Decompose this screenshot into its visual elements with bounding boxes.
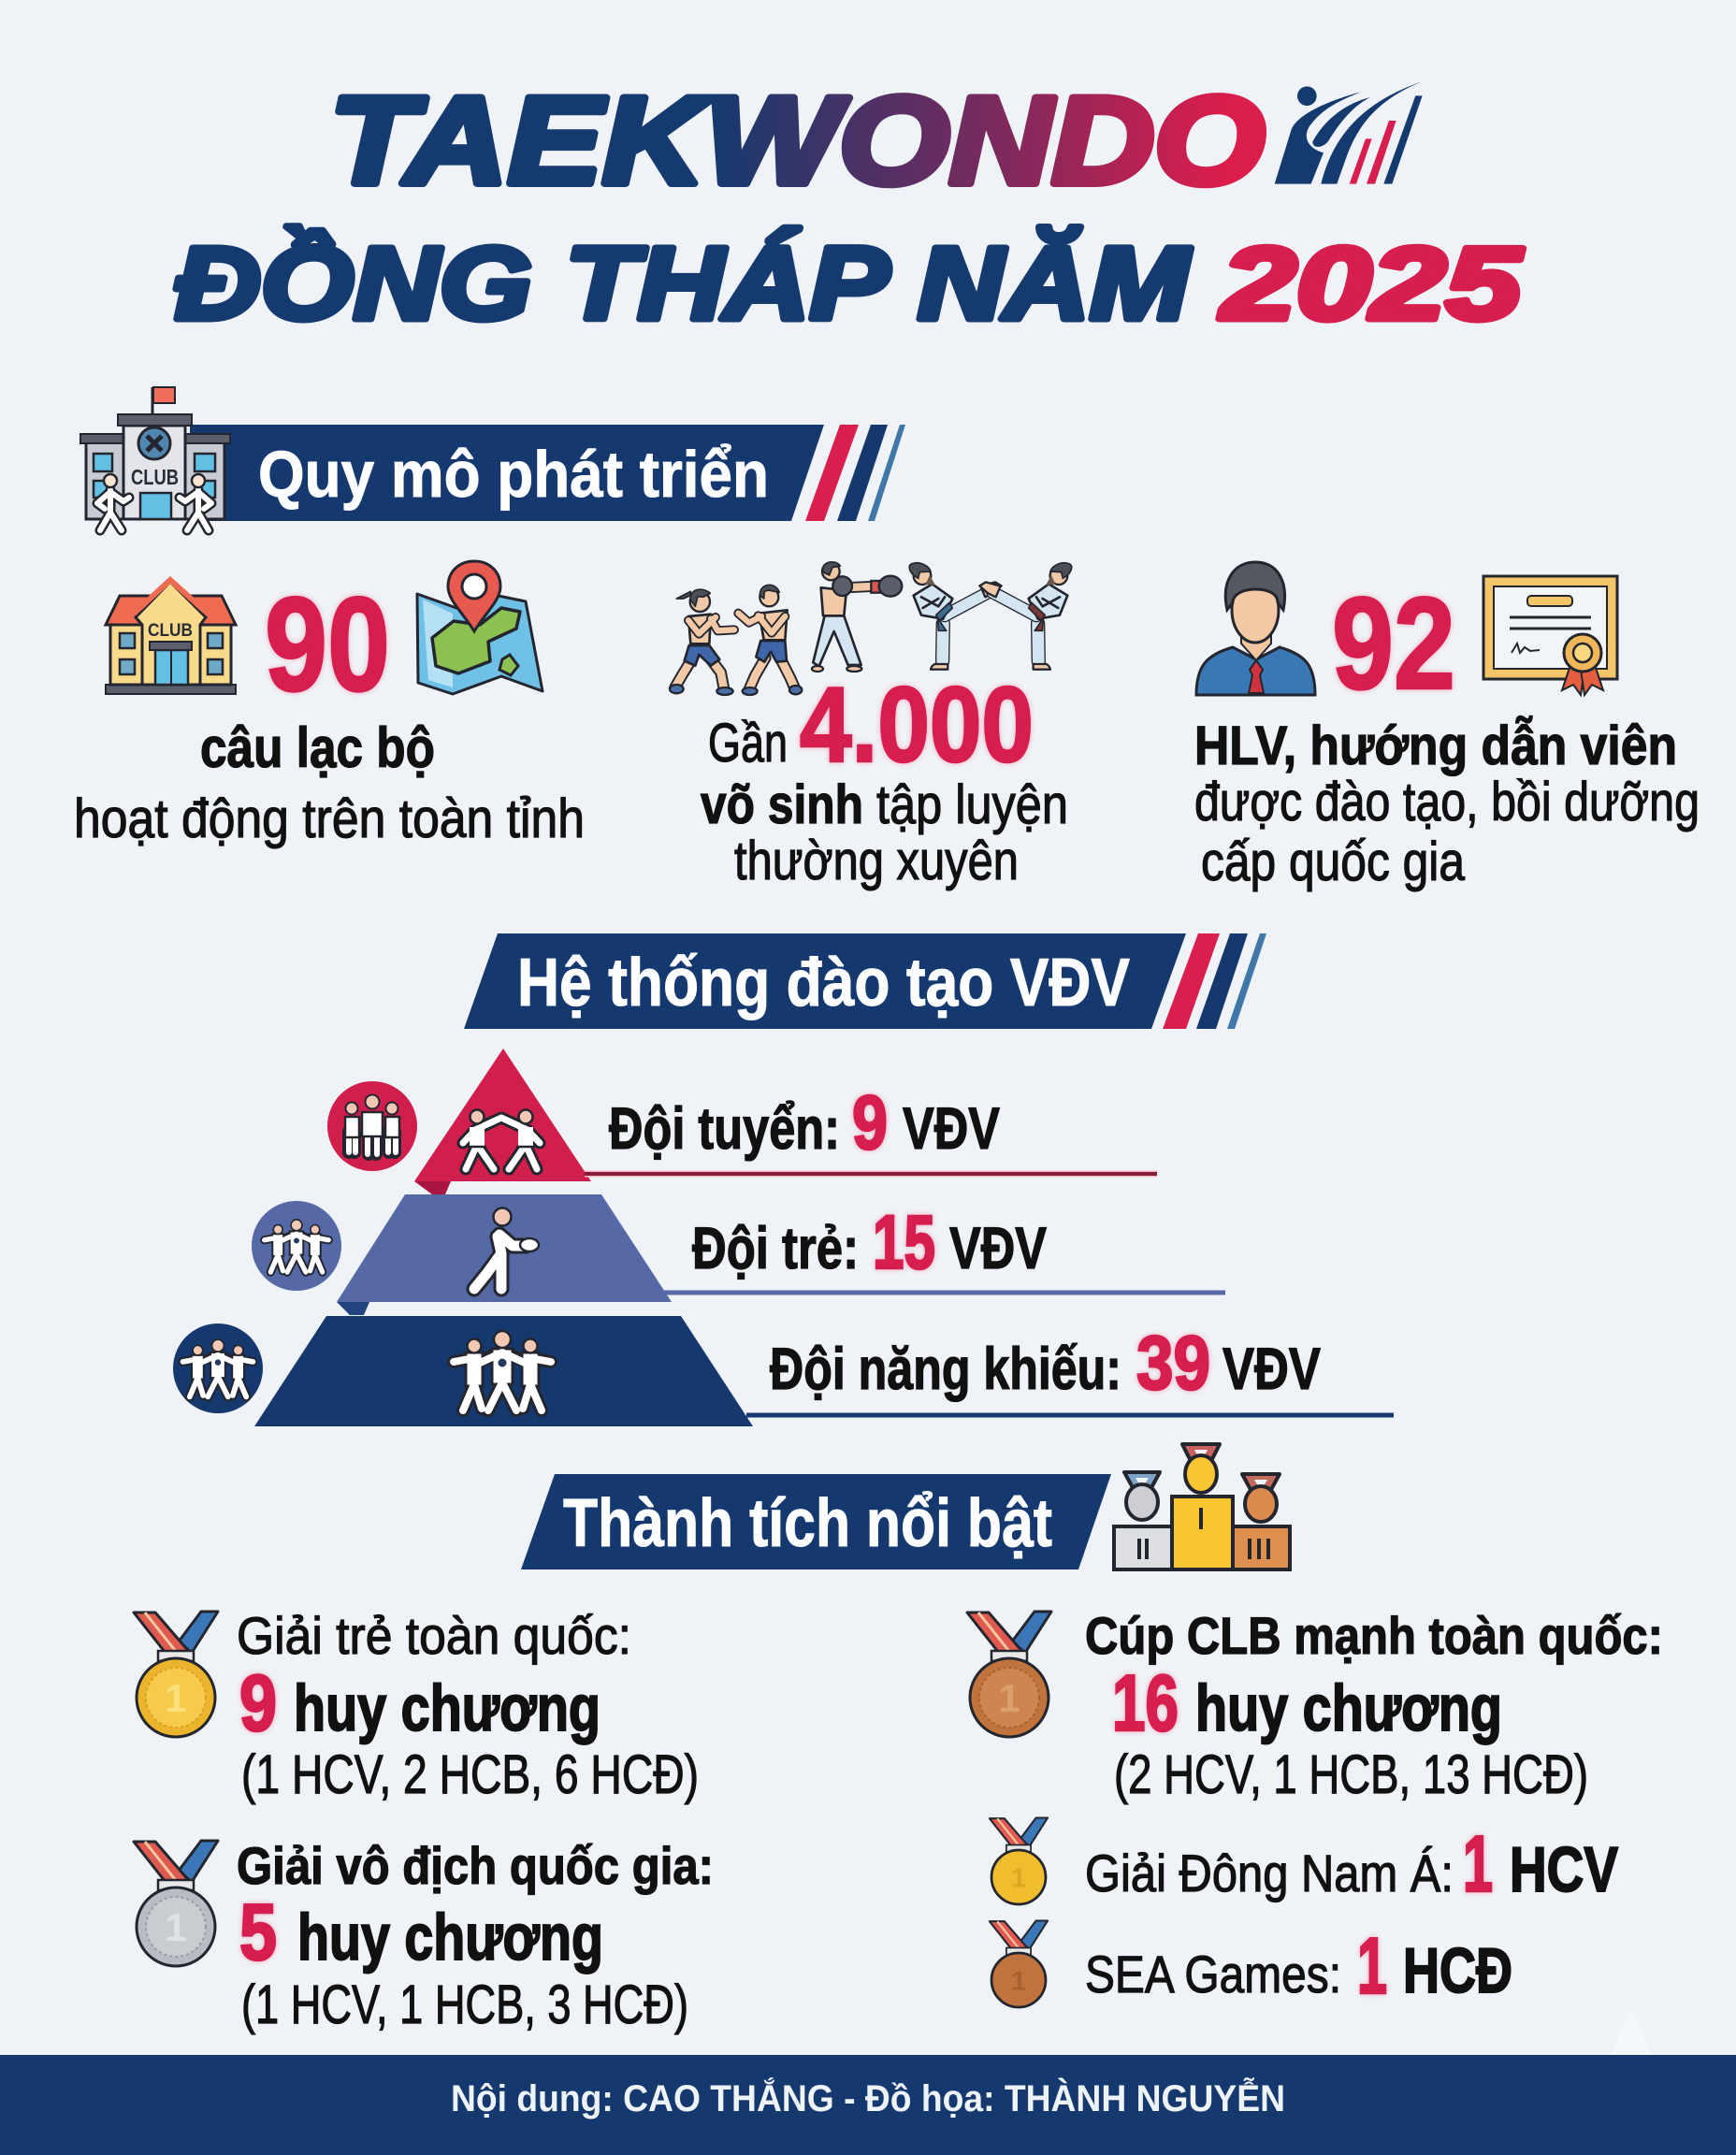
text: huy chương: huy chương — [297, 1901, 603, 1974]
decorative faint triangle — [1611, 2008, 1652, 2055]
title — [175, 72, 1523, 341]
text: medal breakdown: (1 HCV, 1 HCB, 3 HCĐ) — [241, 1974, 688, 2035]
heading: Quy mô phát triển — [190, 425, 905, 521]
icon: small gold medal: 1 — [1011, 1863, 1026, 1893]
icon: club house: CLUB — [148, 621, 193, 641]
text: huy chương: huy chương — [294, 1671, 600, 1744]
icon: gold medal — [134, 1612, 218, 1737]
icon: taekwondo logo — [1275, 81, 1423, 184]
text: medal breakdown: (1 HCV, 2 HCB, 6 HCĐ) — [241, 1744, 699, 1805]
text: HCV: HCV — [1510, 1834, 1618, 1905]
label: Đội tuyển: Đội tuyển: — [609, 1096, 840, 1162]
icon: map with pin — [417, 561, 542, 694]
stat: 92 coaches — [1194, 562, 1700, 892]
text: HCĐ: HCĐ — [1403, 1935, 1512, 2006]
label: Đội năng khiếu: VĐV — [1222, 1337, 1321, 1402]
number: 4.000: 4.000 — [800, 666, 1034, 785]
text: thường xuyên: thường xuyên — [734, 831, 1019, 891]
number: 90: 90 — [265, 571, 390, 719]
circle icon: talent team — [173, 1323, 263, 1413]
icon: gold medal: 1 — [165, 1676, 187, 1720]
number: 5: 5 — [239, 1888, 277, 1977]
fighter: girl — [670, 589, 734, 695]
text: Giải trẻ toàn quốc: Giải trẻ toàn quốc: — [237, 1606, 631, 1665]
text: cấp quốc gia: cấp quốc gia — [1201, 832, 1466, 892]
achievement: Cúp CLB mạnh toàn quốc — [967, 1606, 1663, 1805]
label: Đội năng khiếu: Đội năng khiếu: — [770, 1337, 1121, 1402]
chart: training pyramid — [173, 1049, 753, 1426]
label: Đội trẻ: Đội trẻ: — [692, 1216, 859, 1281]
icon: bronze medal — [967, 1612, 1051, 1737]
text: Cúp CLB mạnh toàn quốc: Cúp CLB mạnh toàn quốc: — [1085, 1606, 1663, 1665]
fighter: boxer — [812, 562, 902, 672]
text: hoạt động trên toàn tỉnh: hoạt động trên toàn tỉnh — [74, 788, 585, 849]
number: 1: 1 — [1463, 1820, 1493, 1909]
label: Đội tuyển: 9 — [852, 1080, 888, 1165]
icon: coach — [1196, 562, 1315, 695]
level: youth team — [337, 1194, 672, 1315]
achievement: Giải vô địch quốc gia — [134, 1836, 714, 2035]
heading: Thành tích nổi bật: Thành tích nổi bật — [563, 1486, 1052, 1561]
achievement: Giải trẻ toàn quốc — [134, 1606, 699, 1805]
label: Đội tuyển: VĐV — [903, 1096, 1000, 1162]
number: 92: 92 — [1332, 570, 1455, 716]
label: Đội tuyển — [585, 1080, 1157, 1174]
text: câu lạc bộ: câu lạc bộ — [200, 716, 435, 779]
icon: podium with medals — [1114, 1444, 1290, 1569]
text: võ sinh tập luyện — [701, 774, 1068, 835]
stat: 90 clubs — [74, 561, 585, 849]
circle icon: national team — [327, 1081, 417, 1171]
heading: Quy mô phát triển: Quy mô phát triển — [258, 438, 769, 511]
text: võ sinh tập luyện: tập luyện — [876, 774, 1068, 835]
level: talent team — [254, 1316, 753, 1426]
stat: 4000 students — [670, 562, 1072, 891]
icon: silver medal: 1 — [165, 1905, 187, 1949]
title: ĐỒNG THÁP NĂM — [175, 226, 1192, 341]
text: medal breakdown: (2 HCV, 1 HCB, 13 HCĐ) — [1114, 1744, 1588, 1805]
fighter: right kicker — [979, 563, 1072, 670]
number: 9: 9 — [239, 1659, 277, 1748]
icon: small gold medal — [990, 1818, 1048, 1904]
level: national team — [414, 1049, 591, 1194]
label: Đội trẻ: 15 — [873, 1200, 935, 1285]
heading: Thành tích nổi bật — [521, 1474, 1111, 1569]
label: Đội năng khiếu — [746, 1321, 1394, 1415]
title: 2025 — [1219, 226, 1523, 341]
icon: small bronze medal: 1 — [1011, 1966, 1026, 1996]
footer — [0, 2055, 1736, 2155]
text: HLV, hướng dẫn viên: HLV, hướng dẫn viên — [1194, 716, 1677, 776]
icon: small bronze medal — [990, 1921, 1048, 2007]
label: Đội trẻ — [664, 1200, 1225, 1293]
text: SEA Games: SEA Games: — [1085, 1945, 1341, 2003]
fighter: left kicker — [909, 563, 1002, 670]
heading: Hệ thống đào tạo VĐV: Hệ thống đào tạo VĐV — [517, 946, 1130, 1020]
icon: five fighters — [670, 562, 1072, 695]
achievement: SEA Games — [990, 1921, 1512, 2011]
text: Gần: Gần — [708, 713, 788, 774]
text: Giải vô địch quốc gia: Giải vô địch quốc gia: — [237, 1836, 714, 1895]
number: 1: 1 — [1357, 1922, 1387, 2011]
text: võ sinh tập luyện: võ sinh — [701, 774, 863, 835]
label: Đội năng khiếu: 39 — [1136, 1321, 1210, 1406]
heading: Hệ thống đào tạo VĐV — [464, 933, 1266, 1029]
label: Đội trẻ: VĐV — [949, 1216, 1047, 1281]
icon: club house — [106, 580, 236, 694]
icon: certificate — [1483, 576, 1617, 695]
icon: club building with fighters: CLUB — [131, 465, 179, 489]
icon: club building with fighters — [80, 387, 230, 530]
text: Giải Đông Nam Á: Giải Đông Nam Á: — [1085, 1844, 1454, 1902]
fighter: boy — [738, 585, 802, 695]
icon: bronze medal: 1 — [998, 1676, 1020, 1720]
icon: silver medal — [134, 1841, 218, 1966]
footer: Nội dung: CAO THẮNG - Đồ họa: THÀNH NGUYỄN — [451, 2076, 1285, 2119]
title: TAEKWONDO — [329, 72, 1265, 210]
circle icon: youth team — [252, 1201, 341, 1291]
achievement: Giải Đông Nam Á — [990, 1818, 1618, 1909]
number: 16: 16 — [1112, 1659, 1179, 1748]
text: huy chương: huy chương — [1195, 1671, 1502, 1744]
